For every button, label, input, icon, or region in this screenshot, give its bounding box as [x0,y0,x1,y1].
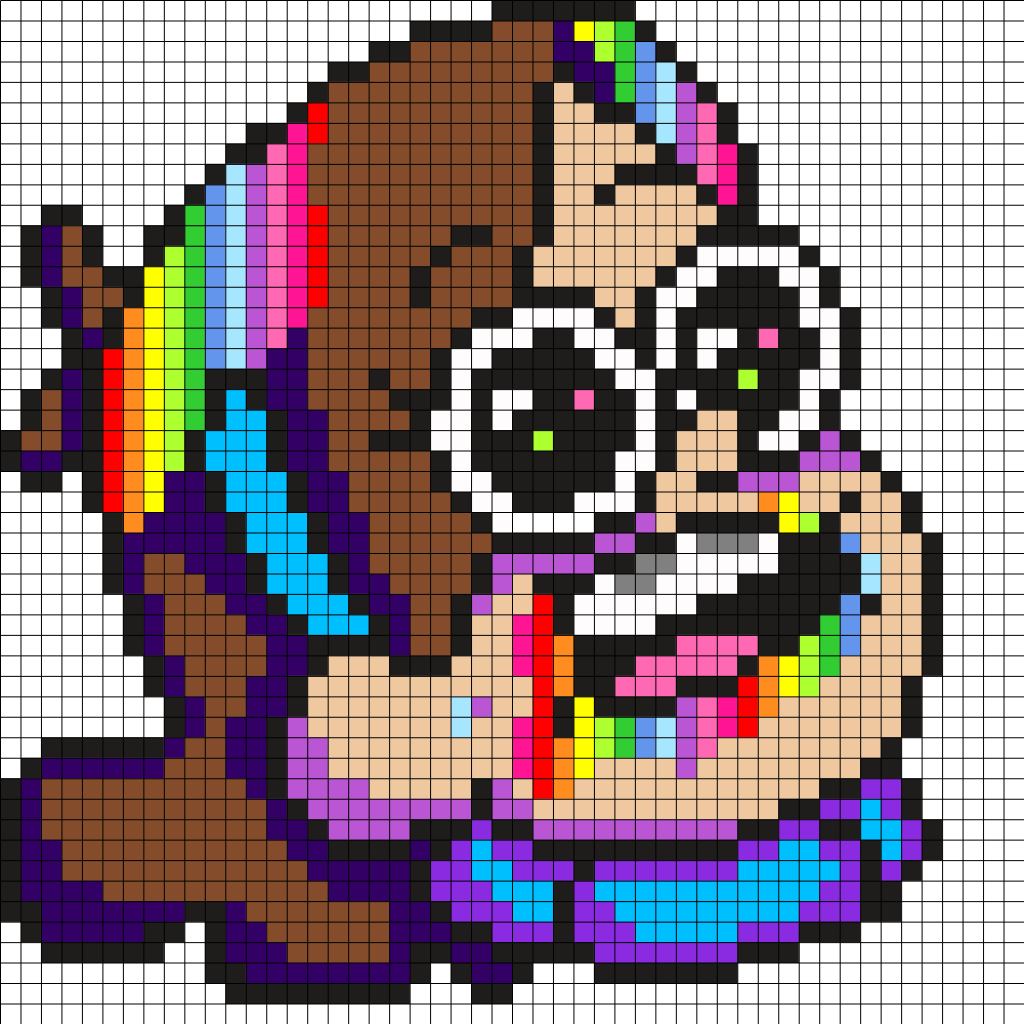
violet skirt [430,788,922,952]
rainbow: yellow band [143,31,799,768]
rainbow: green band [184,31,840,748]
rainbow: light cyan band [225,72,881,748]
white eye highlights and mask [430,256,840,625]
brown hair and tail [20,31,553,952]
sky blue streak and skirt [205,399,901,932]
skin tan body and face [307,92,922,809]
rainbow: blue band [205,51,860,748]
rainbow: lime band [164,31,819,748]
pink band and mouth [266,113,778,748]
orchid band and collar [246,92,860,829]
grey teeth shading [614,543,758,584]
dark purple hair shadow [20,31,614,973]
rainbow: red band [102,113,758,788]
hot pink band [287,133,737,768]
rainbow: orange band [123,317,778,788]
